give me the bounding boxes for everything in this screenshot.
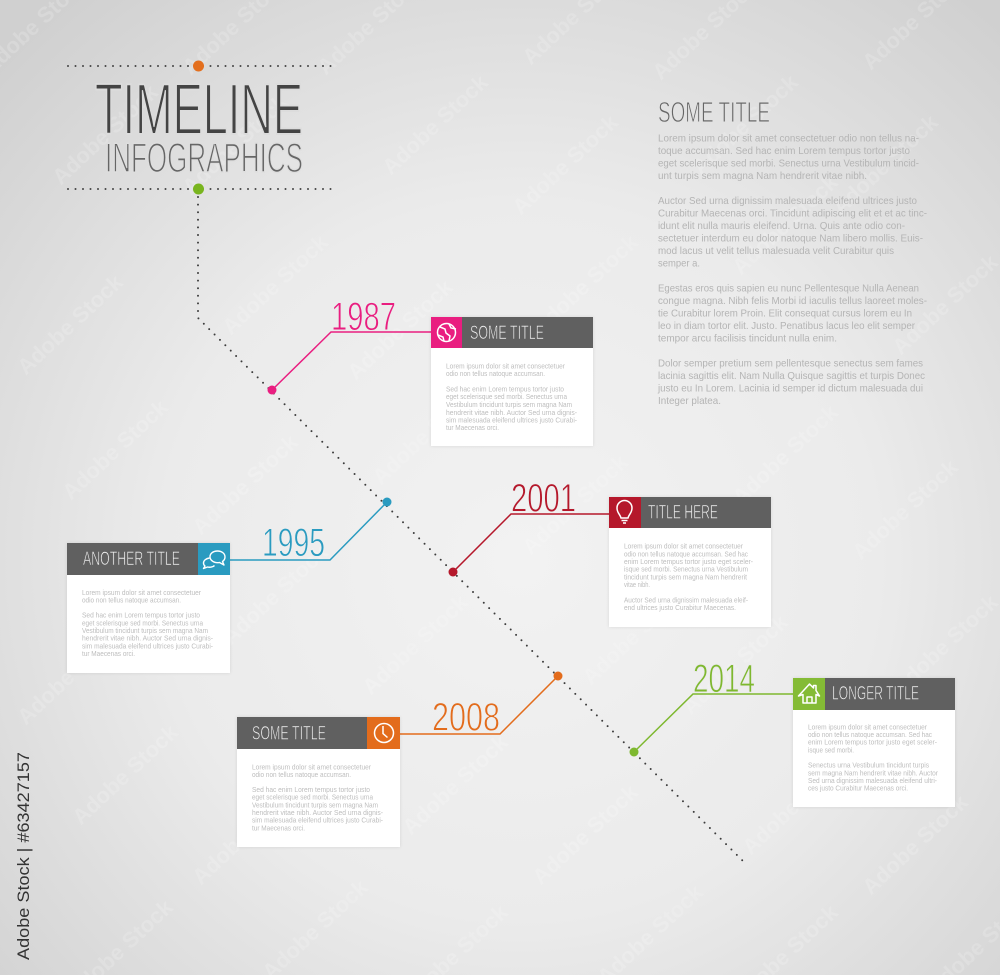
watermark pattern: Adobe Stock [727,169,843,280]
watermark pattern: Adobe Stock [847,454,963,565]
text column: some title: lacinia sagittis elit. Nam Nulla Quisque sagittis et turpis Donec [658,370,925,382]
watermark pattern: Adobe Stock [177,89,293,200]
event 2008: hendrerit vitae nibh. Auctor Sed urna dignis- [252,808,383,817]
watermark pattern: Adobe Stock [527,779,643,890]
event 1995: sim malesuada eleifend ultrices justo Curabi- [82,641,213,650]
timeline dotted path [198,197,743,861]
event 2008: SOME TITLE [252,724,326,744]
event 2008: 2008 [432,696,500,740]
event 2014: enim Lorem tempus tortor justo eget sceler- [808,738,937,747]
event 2008: tur Maecenas orci. [252,823,305,832]
watermark pattern: Adobe Stock [397,729,513,840]
event 1995: Sed hac enim Lorem tempus tortor justo [82,611,200,620]
watermark pattern: Adobe Stock [47,79,163,190]
text column: some title: eget scelerisque sed morbi. Senectus urna Vestibulum tincid- [658,158,919,170]
watermark pattern: Adobe Stock [887,249,1000,360]
watermark pattern: Adobe Stock [12,619,128,730]
event 2014: Senectus urna Vestibulum tincidunt turpis [808,761,929,770]
event 1995: Vestibulum tincidunt turpis sem magna Nam [82,626,208,635]
text column: some title: mod lacus ut velit tellus malesuada velit Curabitur quis [658,245,894,257]
event 2001: vitae nibh. [624,580,650,589]
watermark pattern: Adobe Stock [357,589,473,700]
event 2001: Lorem ipsum dolor sit amet consectetuer [624,542,743,551]
event 2014: LONGER TITLE [832,684,919,704]
text column: some title: toque accumsan. Sed hac enim Lorem tempus tortor justo [658,145,910,157]
watermark pattern: Adobe Stock [527,229,643,340]
watermark pattern: Adobe Stock [677,609,793,720]
event 1987: Vestibulum tincidunt turpis sem magna Nam [446,400,572,409]
text column: some title: SOME TITLE [658,97,770,129]
event 1995 [67,498,392,673]
watermark pattern: Adobe Stock [727,399,843,510]
event 1987: hendrerit vitae nibh. Auctor Sed urna dignis- [446,408,577,417]
event 2008 [237,672,562,847]
event 1987: Sed hac enim Lorem tempus tortor justo [446,384,564,394]
event 2008: sim malesuada eleifend ultrices justo Curabi- [252,816,383,825]
event 2014 [630,657,955,807]
text column: some title: semper a. [658,258,700,270]
event 2008: Lorem ipsum dolor sit amet consectetuer [252,762,371,771]
text column: some title: tie Curabitur lorem Proin. Elit consequat cursus lorem eu In [658,308,912,320]
title block: INFOGRAPHICS [105,134,303,181]
event 1987: 1987 [331,295,396,339]
event 1995: eget scelerisque sed morbi. Senectus urna [82,618,204,627]
event 2014: Lorem ipsum dolor sit amet consectetuer [808,722,927,731]
watermark pattern: Adobe Stock [827,109,943,220]
watermark pattern: Adobe Stock [517,449,633,560]
title block: TIMELINE [95,70,303,150]
stock id label: Adobe Stock | #63427157 [14,752,33,960]
event 2001: end ultrices justo Curabitur Maecenas. [624,603,736,612]
event 2014: ces justo Curabitur Maecenas orci. [808,784,908,793]
title block [68,60,331,194]
text column: some title: Dolor semper pretium sem pellentesque senectus sem fames [658,358,923,370]
event 2001: tincidunt turpis sem magna Nam hendrerit [624,572,748,581]
text column: some title: Lorem ipsum dolor sit amet consectetuer odio non tellus na- [658,133,919,145]
watermark pattern: Adobe Stock [187,779,303,890]
event 2001: Auctor Sed urna dignissim malesuada eleif- [624,595,748,604]
text column: some title: idunt elit nulla mauris eleifend. Urna. Quis ante odio con- [658,220,905,232]
watermark pattern: Adobe Stock [507,109,623,220]
watermark pattern: Adobe Stock [857,789,973,900]
watermark pattern: Adobe Stock [687,69,803,180]
event 2001: isque sed morbi. Senectus urna Vestibulum [624,565,748,574]
watermark pattern: Adobe Stock [737,749,853,860]
event 2001: enim Lorem tempus tortor justo eget sceler- [624,557,753,566]
watermark pattern: Adobe Stock [217,229,333,340]
event 2014: sem magna Nam hendrerit vitae nibh. Auctor [808,768,938,777]
watermark pattern: Adobe Stock [342,274,458,385]
watermark pattern: Adobe Stock [577,579,693,690]
text column: some title [657,97,927,407]
event 2001: TITLE HERE [648,502,718,524]
text column: some title: Curabitur Maecenas orci. Tincidunt adipiscing elit et et ac tinc- [658,208,927,220]
event 2014: odio non tellus natoque accumsan. Sed hac [808,730,932,739]
watermark pattern: Adobe Stock [67,719,183,830]
event 2001 [448,476,771,627]
event 1995: Lorem ipsum dolor sit amet consectetuer [82,588,201,597]
text column: some title: unt turpis sem magna Nam hendrerit vitae nibh. [658,170,867,182]
event 2014: Sed urna dignissim malesuada eleifend ultri- [808,776,937,785]
event 1995: ANOTHER TITLE [83,549,180,570]
event 2014: 2014 [693,657,755,701]
event 2008: Vestibulum tincidunt turpis sem magna Nam [252,800,378,809]
text column: some title: Egestas eros quis sapien eu nunc Pellentesque Nulla Aenean [658,283,919,295]
text column: some title: tempor arcu facilisis tincidunt nulla enim. [658,333,837,345]
event 2001: 2001 [511,476,576,520]
event 2001: odio non tellus natoque accumsan. Sed hac [624,549,748,558]
event 1995: hendrerit vitae nibh. Auctor Sed urna dignis- [82,634,213,643]
event 2008: odio non tellus natoque accumsan. [252,770,351,779]
event 1987: Lorem ipsum dolor sit amet consectetuer [446,362,565,370]
text column: some title: leo in diam tortor elit. Justo. Penatibus lacus leo elit semper [658,320,915,332]
event 1995: tur Maecenas orci. [82,649,135,658]
watermark pattern: Adobe Stock [12,269,128,380]
watermark pattern: Adobe Stock [887,589,1000,700]
watermark pattern: Adobe Stock [217,539,333,650]
text column: some title: justo eu In Lorem. Lacinia id semper id dictum malesuada dui [657,383,923,395]
event 1995: odio non tellus natoque accumsan. [82,596,181,605]
event 1995: 1995 [262,521,325,565]
event 2008: eget scelerisque sed morbi. Senectus urna [252,793,374,802]
event 2008: Sed hac enim Lorem tempus tortor justo [252,785,370,794]
text column: some title: sectetuer interdum eu dolor natoque Nam libero mollis. Euis- [658,233,923,245]
watermark pattern: Adobe Stock [57,394,173,505]
event 1987: SOME TITLE [470,323,544,344]
text column: some title: congue magna. Nibh felis Morbi id iaculis tellus laoreet moles- [658,295,927,307]
text column: some title: Integer platea. [658,395,721,407]
event 1987: eget scelerisque sed morbi. Senectus urna [446,392,568,401]
event 1987 [268,295,593,446]
event 1987: sim malesuada eleifend ultrices justo Curabi- [446,416,577,424]
event 1987: odio non tellus natoque accumsan. [446,369,545,378]
watermark pattern: Adobe Stock [187,429,303,540]
text column: some title: Auctor Sed urna dignissim malesuada eleifend ultrices justo [658,195,917,207]
watermark pattern: Adobe Stock [367,379,483,490]
event 2014: isque sed morbi. [808,745,854,754]
watermark pattern: Adobe Stock [377,69,493,180]
event 1987: tur Maecenas orci. [446,423,499,432]
